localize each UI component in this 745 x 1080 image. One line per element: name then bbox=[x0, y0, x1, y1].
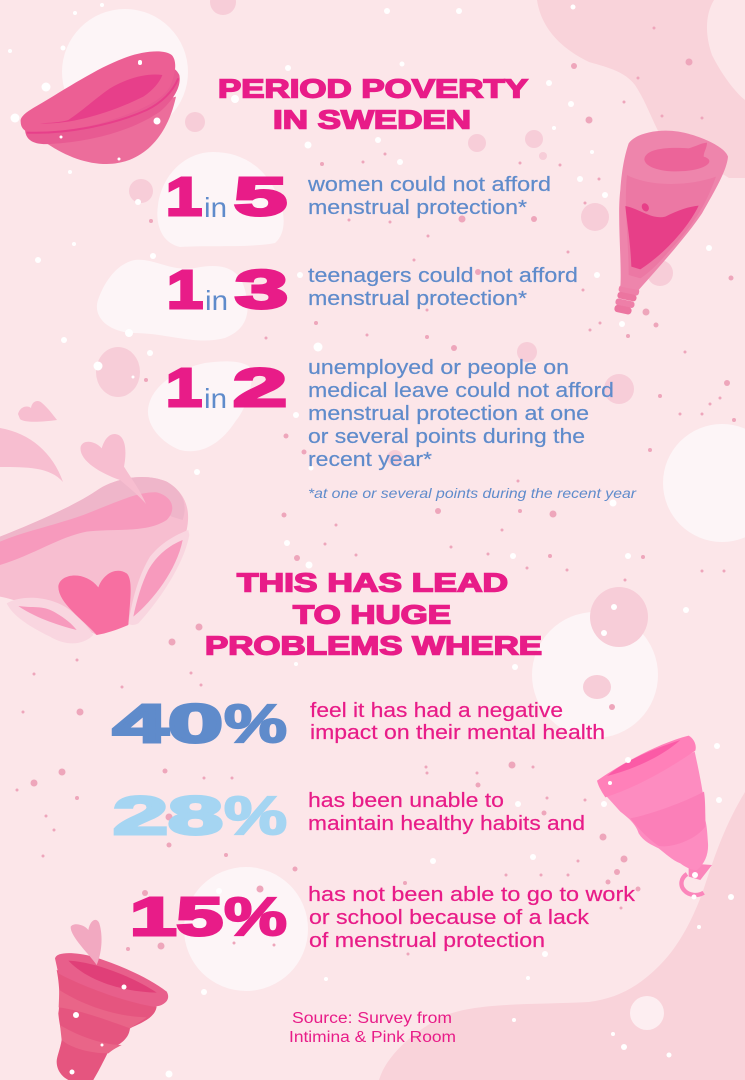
pull tab bbox=[689, 863, 712, 880]
text: women: women could not afford bbox=[307, 174, 551, 196]
body folds bbox=[59, 990, 147, 1053]
wave: bottom right bbox=[379, 792, 745, 1080]
stat: 28%: 28 bbox=[113, 786, 223, 846]
heading: problems: TO HUGE bbox=[293, 600, 451, 630]
text: mental health bbox=[310, 700, 605, 744]
title: IN SWEDEN bbox=[273, 104, 471, 134]
icon: underwear with heart bbox=[0, 434, 189, 643]
soft pink circles bbox=[96, 0, 673, 699]
text: mental health: impact on their mental health bbox=[310, 722, 605, 744]
text: unemployed: recent year* bbox=[308, 449, 432, 471]
stat: 1 in 3: in bbox=[205, 285, 228, 316]
stat: 40%: % bbox=[224, 694, 287, 754]
text: unemployed bbox=[308, 357, 614, 471]
heading: problems bbox=[205, 568, 542, 660]
footnote: *at one or several points during the recent year bbox=[308, 485, 638, 501]
left lace inner bbox=[18, 606, 77, 630]
text: unemployed: menstrual protection at one bbox=[308, 403, 589, 425]
body centre bbox=[626, 175, 716, 278]
cup lower rim bbox=[25, 67, 180, 144]
text: teenagers bbox=[308, 265, 578, 310]
cup opening bbox=[644, 143, 709, 171]
text: healthy habits: maintain healthy habits and bbox=[308, 813, 585, 835]
stat: 40%: 40 bbox=[113, 694, 223, 754]
white blob behind 1 in 2 bbox=[148, 361, 253, 451]
white blob behind 1 in 3 bbox=[97, 260, 248, 340]
body bbox=[619, 131, 728, 290]
white blob behind 1 in 5 bbox=[157, 152, 284, 247]
left lace bbox=[7, 598, 93, 643]
wave: top right bbox=[537, 0, 745, 178]
body shade bbox=[630, 792, 705, 846]
opening bbox=[68, 961, 157, 993]
white circle bottom right bbox=[630, 996, 664, 1030]
text: work or school: of menstrual protection bbox=[309, 930, 545, 952]
text: unemployed: unemployed or people on bbox=[308, 357, 569, 379]
stat: 1 in 5: 5 bbox=[234, 167, 287, 227]
stat: 1 in 5: in bbox=[204, 192, 227, 223]
text: unemployed: medical leave could not afford bbox=[308, 380, 614, 402]
text: teenagers: teenagers could not afford bbox=[308, 265, 578, 287]
ring bbox=[681, 874, 704, 895]
text: work or school: has not been able to go to work bbox=[308, 884, 636, 906]
rim bbox=[55, 953, 168, 1007]
underwear base bbox=[0, 477, 188, 635]
rim bbox=[597, 736, 696, 797]
white circle lower middle bbox=[532, 612, 658, 738]
icon: swoosh bbox=[0, 428, 63, 482]
stem bbox=[614, 285, 640, 315]
icon: small heart bbox=[18, 401, 57, 422]
waistband bbox=[0, 477, 185, 553]
heart drop bbox=[80, 434, 146, 504]
source bbox=[289, 1010, 456, 1046]
right lace inner bbox=[133, 540, 183, 617]
stat: 1 in 3: 1 bbox=[167, 260, 203, 320]
source: Source: Survey from bbox=[292, 1010, 452, 1027]
body bbox=[605, 752, 708, 870]
stat: 1 in 5: 1 bbox=[166, 167, 202, 227]
liquid bbox=[625, 206, 699, 269]
text: work or school bbox=[308, 884, 636, 952]
text: unemployed: or several points during the bbox=[308, 426, 585, 448]
inner lining bbox=[0, 492, 172, 565]
stat: 15%: 15 bbox=[130, 887, 223, 947]
text: teenagers: menstrual protection* bbox=[308, 288, 527, 310]
text: work or school: or school because of a lack bbox=[309, 907, 590, 929]
icon: cup lower right with ring bbox=[597, 736, 712, 895]
white circle behind 15% bbox=[184, 867, 308, 991]
stat: 15%: % bbox=[224, 887, 287, 947]
bubble bbox=[640, 202, 650, 213]
stat: 40% bbox=[113, 694, 287, 754]
heart bbox=[71, 920, 102, 965]
stat: 1 in 3: 3 bbox=[235, 260, 288, 320]
stat: 1 in 2: 2 bbox=[233, 358, 287, 418]
cup upper rim bbox=[21, 51, 175, 133]
heading: problems: THIS HAS LEAD bbox=[237, 568, 508, 598]
opening bbox=[607, 740, 680, 776]
icon: cup top left bbox=[21, 51, 180, 164]
stat: 1 in 2: 1 bbox=[166, 358, 202, 418]
text: healthy habits bbox=[308, 790, 585, 835]
heading: problems: PROBLEMS WHERE bbox=[205, 630, 542, 660]
text: women bbox=[307, 174, 551, 219]
stat: 15% bbox=[130, 887, 287, 947]
title: PERIOD POVERTY bbox=[218, 74, 528, 104]
title bbox=[218, 74, 528, 134]
stat: 28%: % bbox=[224, 786, 287, 846]
text: mental health: feel it has had a negative bbox=[310, 700, 563, 722]
cup inner bbox=[40, 74, 162, 124]
body bbox=[57, 970, 157, 1080]
text: healthy habits: has been unable to bbox=[308, 790, 504, 812]
text: women: menstrual protection* bbox=[308, 197, 527, 219]
white circle right bbox=[663, 424, 745, 542]
heart on underwear bbox=[58, 571, 131, 635]
cup rim line bbox=[27, 78, 178, 133]
white circle behind top-left cup bbox=[62, 9, 188, 135]
source: Intimina & Pink Room bbox=[289, 1029, 456, 1046]
stat: 1 in 3 bbox=[167, 260, 288, 320]
stat: 28% bbox=[113, 786, 287, 846]
stat: 1 in 2 bbox=[166, 358, 287, 418]
icon: cup top right with liquid bbox=[614, 131, 728, 315]
stat: 1 in 2: in bbox=[204, 383, 227, 414]
icon: cup bottom left with heart bbox=[55, 920, 168, 1080]
right lace bbox=[128, 530, 189, 625]
stat: 1 in 5 bbox=[166, 167, 287, 227]
cup bowl bbox=[47, 97, 176, 164]
